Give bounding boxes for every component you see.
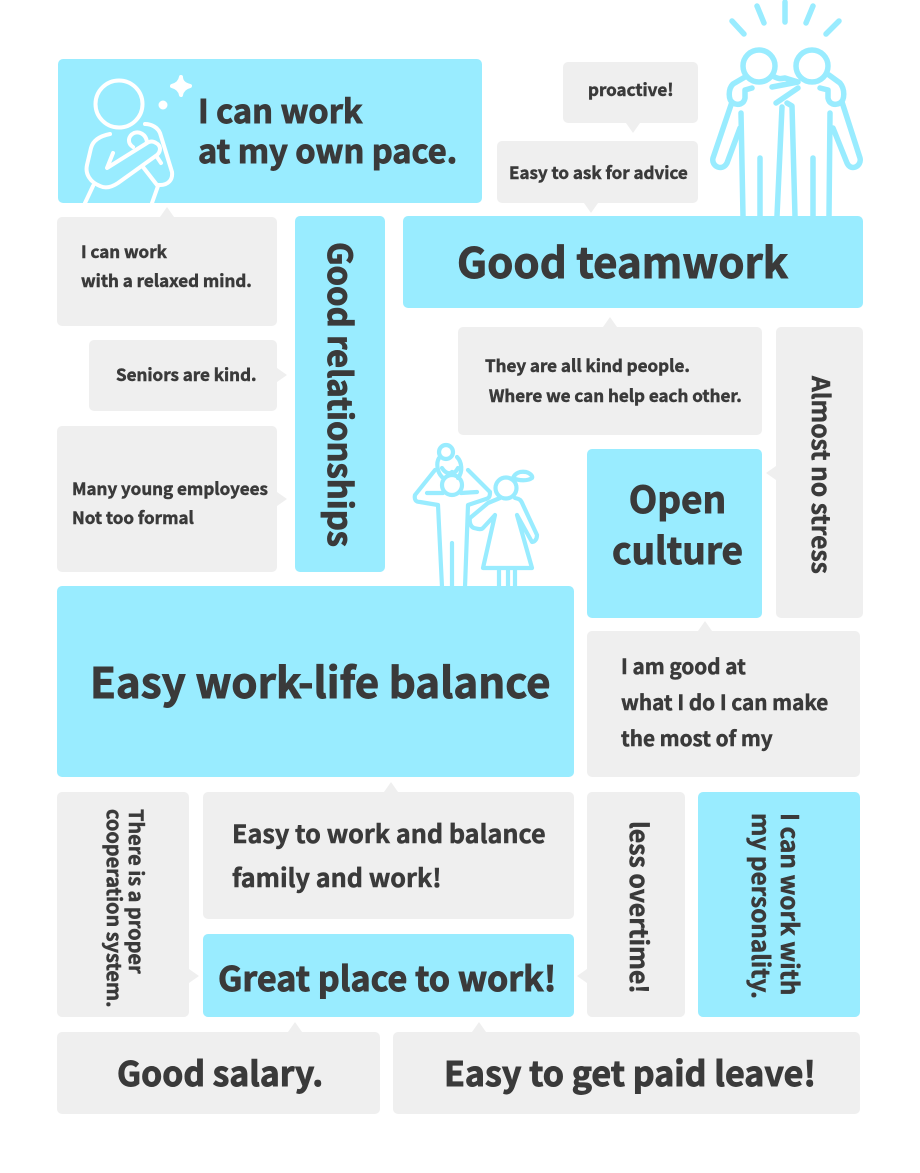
bubble: kind people [458, 327, 762, 435]
heading: good relationships: Good relationships [318, 242, 365, 547]
panel: I can work with my personality [698, 792, 860, 1017]
text: easy to work and balance: family and work! [232, 859, 442, 895]
heading: I can work at my own pace [198, 86, 457, 173]
text: proactive: proactive! [588, 76, 674, 101]
text: I am good at: I am good at [621, 650, 746, 680]
bubble: easy to ask for advice [496, 141, 698, 203]
bubble: proper cooperation system [57, 792, 189, 1017]
heading: open culture: culture [612, 521, 743, 575]
bubble: easy to get paid leave [393, 1032, 860, 1114]
text: I can work with my personality [745, 813, 809, 999]
text: I can work with a relaxed mind: with a relaxed mind. [81, 267, 252, 292]
text: I am good at: what I do I can make [621, 686, 828, 716]
heading: open culture: Open [629, 470, 726, 524]
text: I can work with my personality: I can work with [774, 813, 809, 995]
bubble: easy to work and balance [202, 792, 574, 919]
text: seniors are kind: Seniors are kind. [116, 361, 257, 386]
text: proper cooperation system: cooperation system. [101, 809, 130, 1008]
text: kind people [485, 352, 742, 407]
heading: great place to work: Great place to work! [218, 951, 556, 1001]
bubble: seniors are kind [89, 340, 277, 411]
panel: great place to work [202, 934, 574, 1017]
text: I can work with a relaxed mind [81, 238, 252, 292]
bubble: I am good at [587, 631, 860, 777]
text: kind people: Where we can help each other. [489, 382, 742, 407]
text: I can work with my personality: my personality. [745, 813, 780, 999]
text: many young employees: Many young employees [72, 475, 268, 500]
text: many young employees: Not too formal [72, 504, 194, 529]
bubble: many young employees [57, 426, 277, 572]
text: almost no stress: Almost no stress [804, 376, 840, 574]
heading: good teamwork: Good teamwork [457, 230, 788, 291]
heading: I can work at my own pace: I can work [198, 86, 363, 133]
text: I can work with a relaxed mind: I can work [81, 238, 167, 263]
text: kind people: They are all kind people. [485, 352, 690, 377]
bubble: good salary [57, 1032, 380, 1114]
text: easy to work and balance [232, 815, 546, 895]
bubble: I can work with a relaxed mind [57, 216, 277, 326]
bubble: almost no stress [776, 326, 863, 618]
heading: easy work-life balance: Easy work-life balance [90, 650, 551, 711]
heading: I can work at my own pace: at my own pace. [198, 126, 457, 173]
text: I am good at [621, 650, 828, 752]
text: easy to work and balance: Easy to work and balance [232, 815, 546, 851]
text: easy to ask for advice: Easy to ask for advice [509, 159, 688, 184]
text: less overtime: less overtime! [622, 821, 658, 994]
panel: good teamwork [403, 216, 863, 308]
panel: good relationships [294, 216, 385, 572]
bubble: less overtime [587, 792, 685, 1017]
panel: easy work-life balance [57, 586, 574, 777]
text: many young employees [72, 475, 268, 529]
bubble: proactive [563, 62, 698, 123]
heading: open culture [612, 470, 743, 575]
text: easy to get paid leave: Easy to get paid leave! [444, 1047, 816, 1096]
text: I am good at: the most of my [621, 722, 773, 752]
panel: I can work at my own pace [58, 59, 482, 203]
panel: open culture [587, 449, 762, 618]
text: proper cooperation system: There is a proper [123, 809, 152, 974]
text: proper cooperation system [101, 809, 152, 1008]
text: good salary: Good salary. [117, 1047, 323, 1096]
